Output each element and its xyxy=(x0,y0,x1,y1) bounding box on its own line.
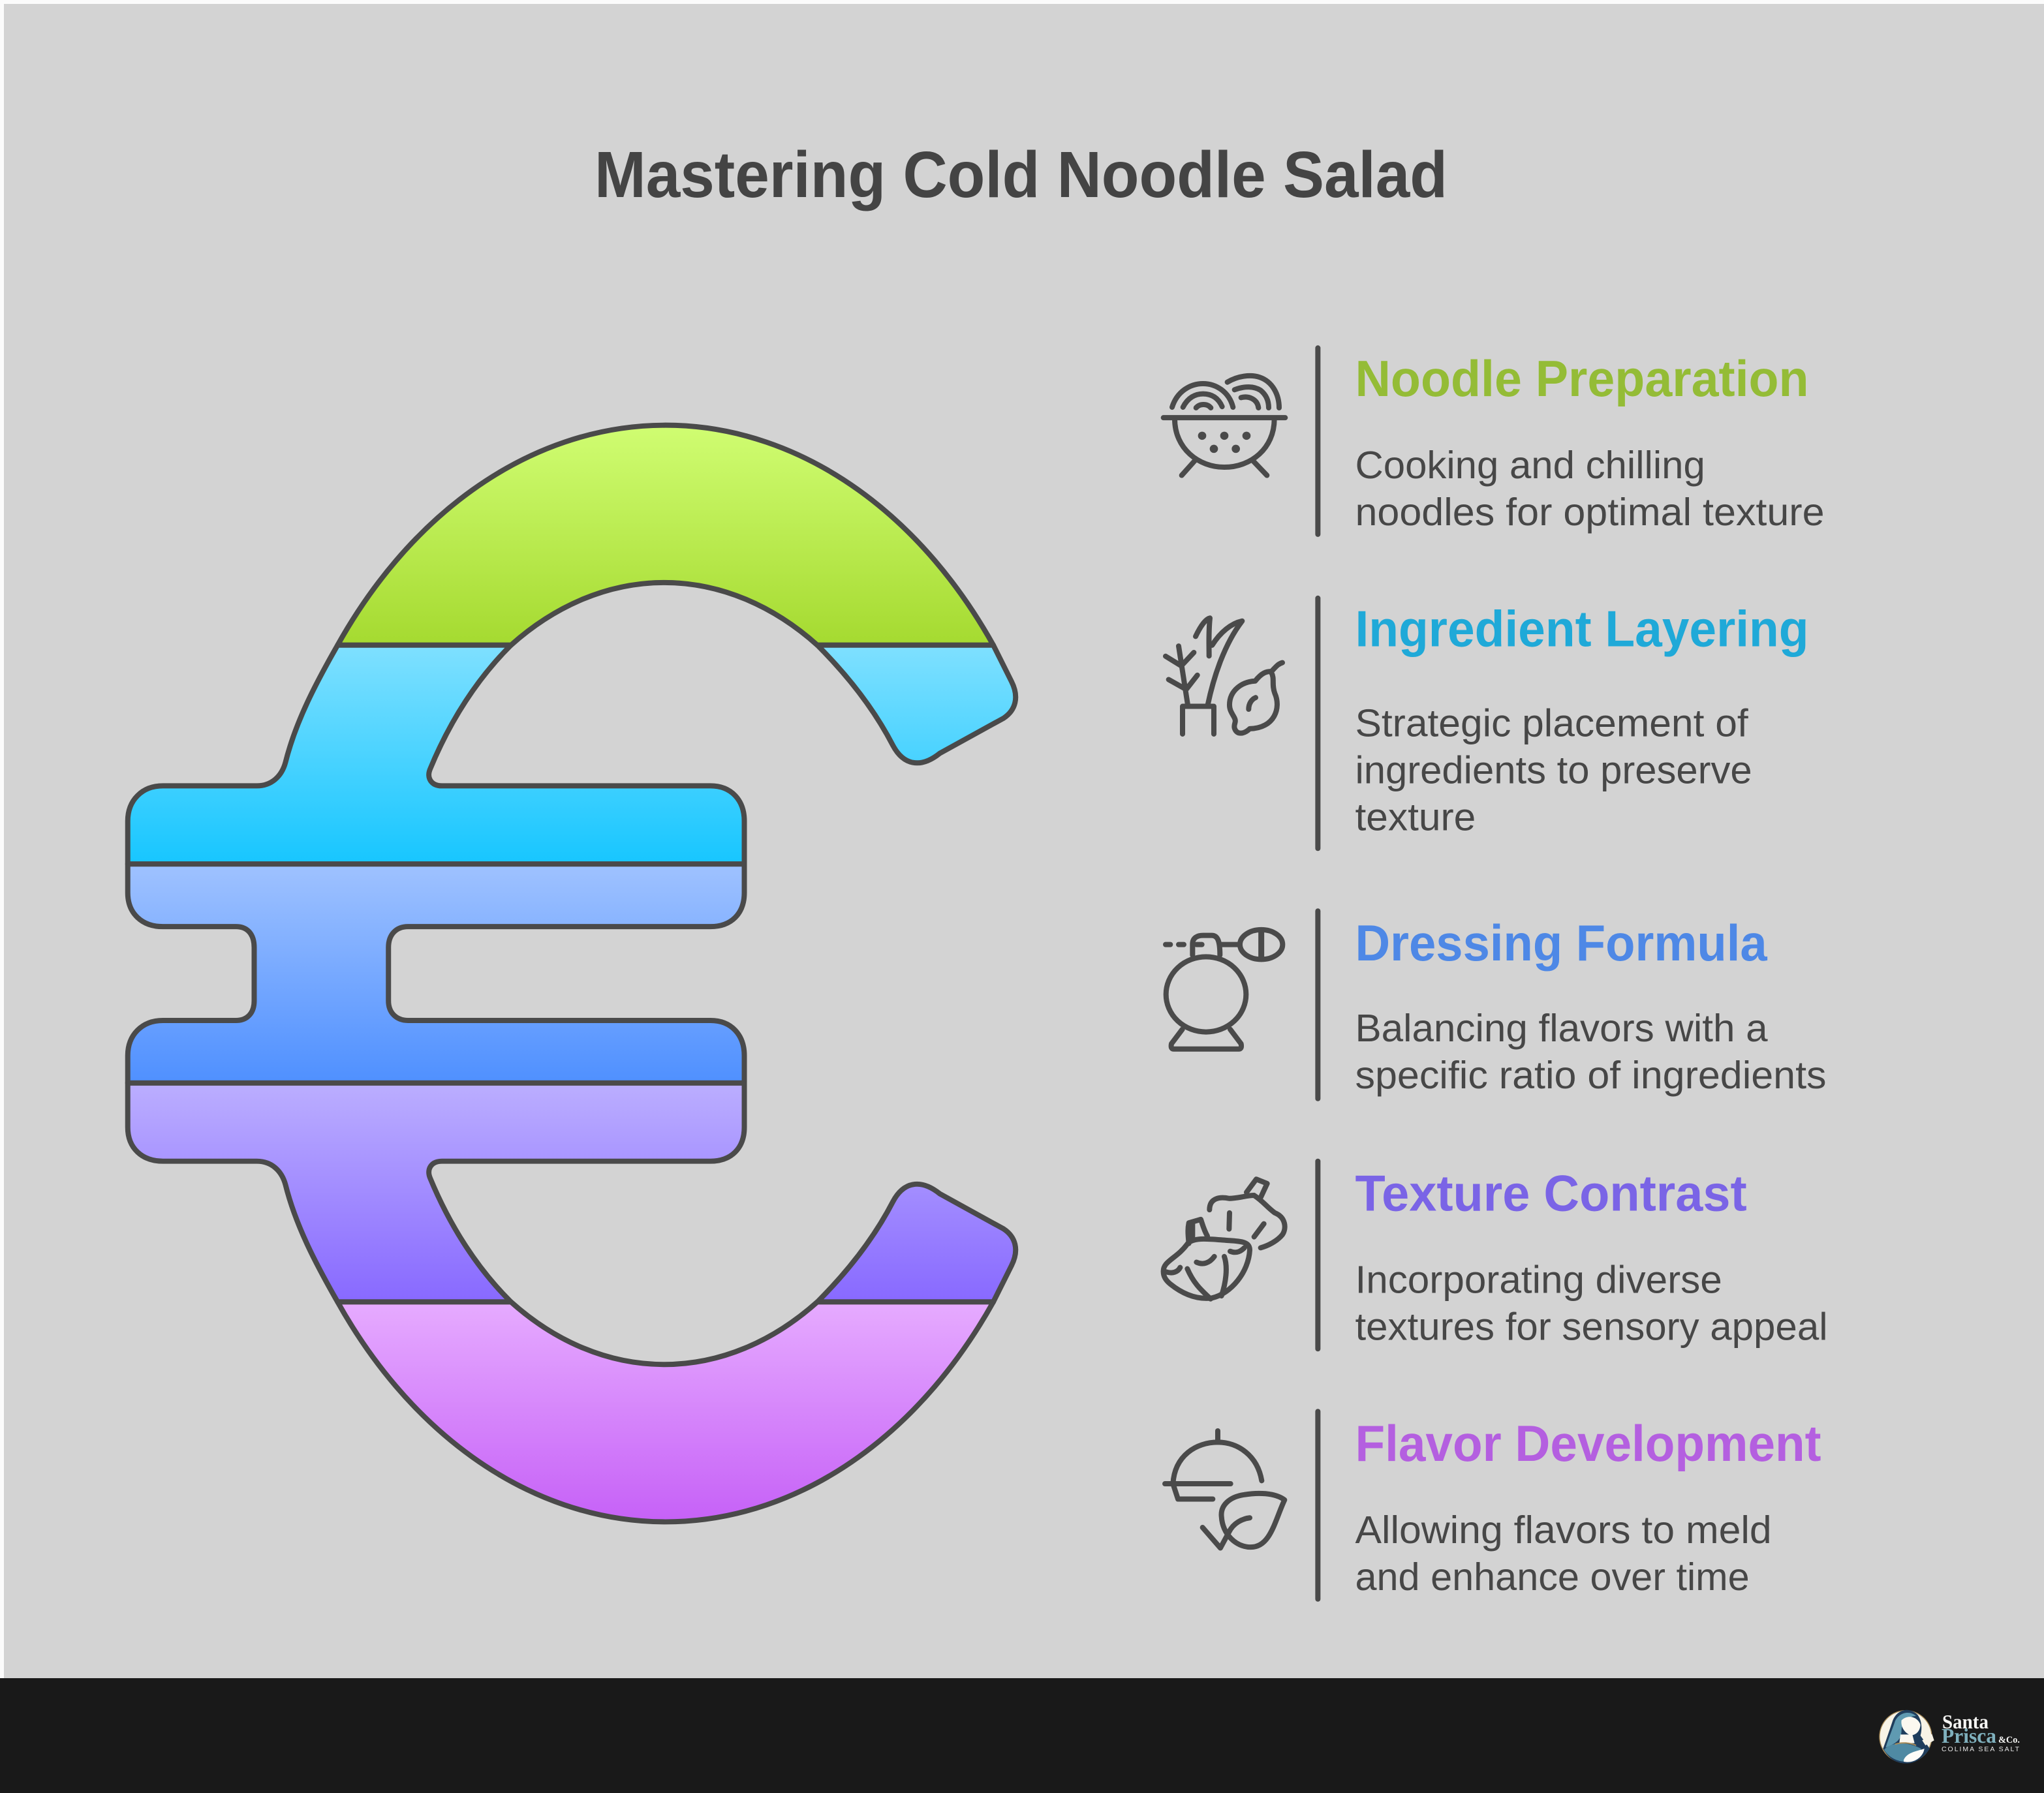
heading: Ingredient Layering xyxy=(1355,600,1809,658)
item: ingredient layering xyxy=(1315,596,1809,851)
description: Allowing flavors to meld xyxy=(1355,1509,1772,1552)
logo wordmark: Santa xyxy=(1942,1710,1989,1733)
segment: noodle preparation green xyxy=(337,425,993,645)
logo emblem xyxy=(1880,1710,1934,1764)
item: flavor development xyxy=(1315,1409,1821,1602)
divider xyxy=(1315,1409,1320,1602)
icon: vegetables texture xyxy=(1164,1179,1285,1299)
description: texture xyxy=(1355,796,1476,838)
description: noodles for optimal texture xyxy=(1355,491,1825,534)
item: dressing formula xyxy=(1315,908,1827,1101)
heading: Dressing Formula xyxy=(1355,914,1767,972)
logo wordmark xyxy=(1942,1710,2020,1753)
segment: texture contrast violet xyxy=(128,1083,1015,1302)
description xyxy=(1355,1259,1828,1348)
icon: cloche and leaf xyxy=(1165,1431,1284,1548)
divider xyxy=(1315,596,1320,851)
description xyxy=(1355,1007,1827,1097)
euro sign diagram xyxy=(128,425,1015,1522)
item: noodle preparation xyxy=(1315,345,1825,537)
logo wordmark: Prisca xyxy=(1942,1724,1996,1747)
description: specific ratio of ingredients xyxy=(1355,1054,1827,1097)
logo wordmark: &Co. xyxy=(1998,1735,2020,1745)
logo: Santa Prisca & Co. xyxy=(1880,1710,2020,1764)
icon: noodle bowl xyxy=(1164,376,1285,476)
description: Balancing flavors with a xyxy=(1355,1007,1768,1050)
title: Mastering Cold Noodle Salad xyxy=(595,138,1448,211)
description xyxy=(1355,444,1825,534)
footer bar xyxy=(0,1678,2044,1793)
segment: flavor development purple xyxy=(337,1302,993,1522)
segment: ingredient layering cyan xyxy=(128,645,1015,864)
icon: herbs and pear xyxy=(1166,618,1282,734)
description xyxy=(1355,1509,1772,1599)
heading: Texture Contrast xyxy=(1355,1165,1747,1222)
divider xyxy=(1315,1159,1320,1351)
description: textures for sensory appeal xyxy=(1355,1306,1828,1348)
segment: dressing formula blue xyxy=(128,864,745,1083)
heading: Noodle Preparation xyxy=(1355,350,1809,407)
divider xyxy=(1315,908,1320,1101)
description xyxy=(1355,703,1752,838)
description: Cooking and chilling xyxy=(1355,444,1705,487)
item list xyxy=(1315,345,1828,1602)
item: texture contrast xyxy=(1315,1159,1828,1351)
heading: Flavor Development xyxy=(1355,1415,1821,1472)
description: Incorporating diverse xyxy=(1355,1259,1722,1301)
logo wordmark: COLIMA SEA SALT xyxy=(1942,1745,2020,1753)
divider xyxy=(1315,345,1320,537)
icon: dressing atomizer bottle xyxy=(1166,930,1282,1049)
description: and enhance over time xyxy=(1355,1556,1750,1599)
description: ingredients to preserve xyxy=(1355,749,1752,791)
description: Strategic placement of xyxy=(1355,703,1748,745)
